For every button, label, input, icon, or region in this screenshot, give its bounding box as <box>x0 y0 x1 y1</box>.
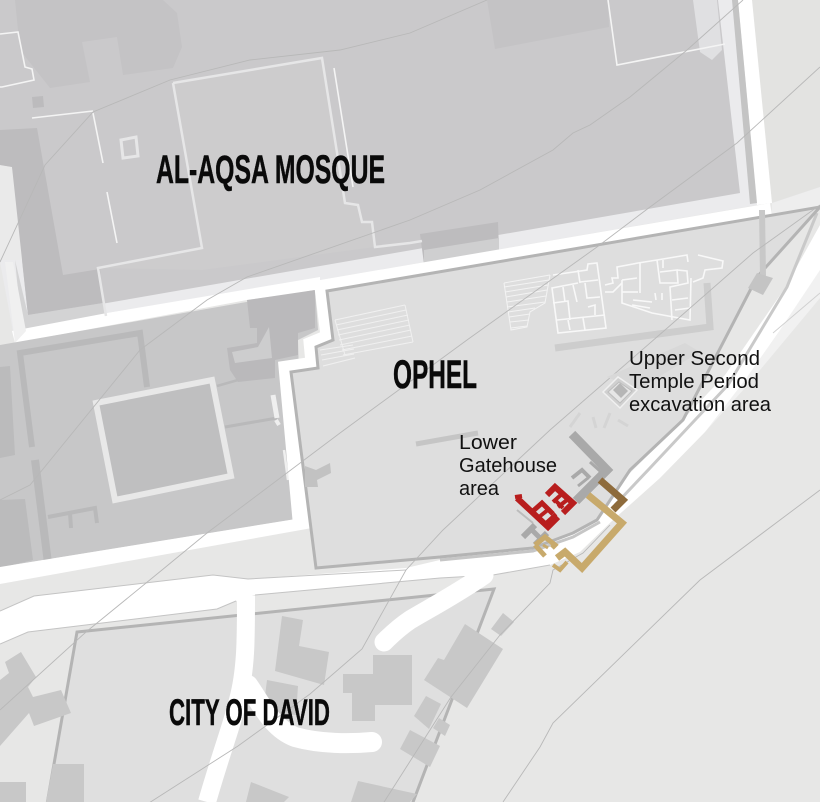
excavated ruins, west block <box>552 263 606 333</box>
courtyard outlines <box>98 58 422 316</box>
panel: Al-Aqsa Mosque compound <box>0 0 772 343</box>
label: Upper Second Temple Period excavation area: excavation area <box>629 394 772 416</box>
white wall marks <box>0 0 725 243</box>
label: Lower Gatehouse area: Gatehouse <box>459 455 557 477</box>
hatched terraces west <box>320 305 413 366</box>
south white road band <box>0 225 820 644</box>
gray walls <box>517 434 607 545</box>
buildings <box>0 613 514 802</box>
tan walls <box>535 495 622 570</box>
faint ruins near excavation area <box>570 413 628 428</box>
brown wall <box>600 480 623 510</box>
label: Lower Gatehouse area <box>459 432 557 500</box>
label: Upper Second Temple Period excavation area: Upper Second <box>629 348 760 370</box>
heading: City of David: CITY OF DAVID <box>169 692 330 733</box>
label: Upper Second Temple Period excavation area <box>629 348 772 416</box>
red walls: Lower Gatehouse <box>515 487 573 527</box>
white access roads <box>207 575 484 802</box>
heading: Ophel: OPHEL <box>393 353 477 397</box>
label: Lower Gatehouse area: area <box>459 478 500 500</box>
white band below the compound <box>12 277 320 343</box>
label: Upper Second Temple Period excavation area: Temple Period <box>629 371 759 393</box>
archaeology plan: excavated walls <box>515 434 623 570</box>
pool <box>96 380 231 500</box>
icon: Upper Second Temple Period excavation square <box>603 343 700 408</box>
panel: City of David <box>0 575 514 802</box>
label: Lower Gatehouse area: Lower <box>459 432 517 454</box>
panel: Ophel <box>291 187 820 568</box>
panel: western block with pool <box>0 290 318 568</box>
hatched terraces north <box>504 275 550 330</box>
heading: Al-Aqsa Mosque: AL-AQSA MOSQUE <box>156 148 385 192</box>
excavated ruins, east block <box>605 255 723 320</box>
faint structure on west wall <box>305 463 331 487</box>
